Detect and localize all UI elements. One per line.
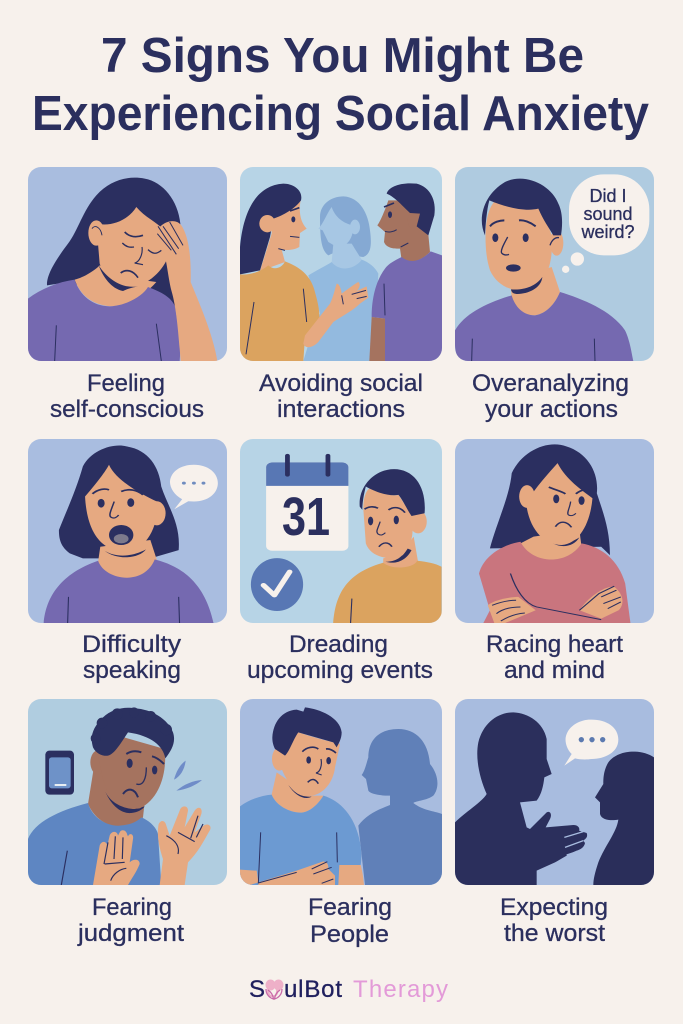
worried man (455, 179, 633, 361)
caption: overanalyzing your actions: your actions (485, 396, 618, 423)
caption: racing heart and mind: Racing heart (486, 631, 623, 658)
worried man in mustard shirt (333, 469, 442, 623)
caption: fearing judgment: judgment (77, 920, 184, 947)
thought bubble (562, 174, 649, 273)
caption: difficulty speaking: speaking (83, 657, 181, 684)
caption: dreading upcoming events: upcoming events (247, 657, 433, 684)
woman speaking (44, 446, 214, 623)
woman with hand on forehead (28, 178, 217, 361)
panel: fearing people (240, 699, 442, 885)
panel: avoiding social interactions (240, 167, 442, 361)
faded woman in background (303, 196, 378, 361)
icon: check mark (251, 558, 303, 611)
caption: feeling self-conscious (50, 370, 204, 423)
caption: avoiding social interactions: Avoiding social (259, 370, 423, 397)
bubble text: Did I (589, 186, 626, 206)
caption: avoiding social interactions: interactions (277, 396, 405, 423)
caption: fearing people: People (310, 921, 389, 948)
shadow figure (358, 729, 442, 885)
caption: dreading upcoming events (247, 631, 433, 684)
caption: racing heart and mind: and mind (504, 657, 605, 684)
icon: calendar (266, 456, 348, 551)
title: 7 Signs You Might Be (101, 29, 584, 83)
bubble text (581, 186, 635, 242)
anxious man with raised hands (28, 707, 211, 885)
caption: difficulty speaking (82, 631, 181, 684)
caption: overanalyzing your actions (472, 370, 629, 423)
caption: fearing judgment: Fearing (92, 894, 172, 921)
logo: SoulBot Therapy: Therapy (353, 976, 448, 1003)
caption: expecting the worst: Expecting (500, 894, 608, 921)
man in purple shirt (369, 183, 442, 361)
panel: expecting the worst (455, 699, 654, 885)
panel: difficulty speaking (28, 439, 227, 623)
bubble text: weird? (581, 222, 635, 242)
caption: dreading upcoming events: Dreading (289, 631, 388, 658)
panel: overanalyzing your actions (455, 167, 654, 361)
title: Experiencing Social Anxiety (32, 87, 649, 141)
caption: feeling self-conscious: self-conscious (50, 396, 204, 423)
logo: SoulBot Therapy: ulBot (284, 976, 342, 1003)
panel: racing heart and mind (455, 439, 654, 623)
worried man in blue shirt (240, 707, 364, 885)
caption: avoiding social interactions (259, 370, 423, 423)
speech bubble with dots (170, 465, 218, 509)
calendar date: 31 (282, 487, 330, 547)
caption: expecting the worst: the worst (504, 920, 605, 947)
woman with crossed arms (479, 444, 630, 623)
panel: fearing judgment (28, 699, 227, 885)
bubble text: sound (583, 204, 633, 224)
caption: difficulty speaking: Difficulty (82, 631, 181, 658)
panel: dreading upcoming events (240, 439, 442, 623)
logo: SoulBot Therapy: o (266, 976, 279, 1003)
caption: racing heart and mind (486, 631, 623, 684)
woman in mustard shirt (240, 184, 368, 361)
caption: overanalyzing your actions: Overanalyzing (472, 370, 629, 397)
title (32, 29, 649, 141)
icon: phone (45, 751, 74, 795)
caption: expecting the worst (500, 894, 608, 947)
caption: fearing people: Fearing (308, 894, 392, 921)
silhouette with open hand (455, 712, 587, 885)
icon: motion accents (174, 761, 202, 791)
speech bubble with dots (564, 720, 618, 766)
caption: feeling self-conscious: Feeling (87, 370, 165, 397)
logo: SoulBot Therapy (249, 976, 448, 1003)
caption: fearing judgment (77, 894, 184, 947)
silhouette on the right (593, 752, 654, 885)
caption: fearing people (308, 894, 392, 948)
panel: feeling self-conscious (28, 167, 227, 361)
logo: SoulBot Therapy: S (249, 976, 265, 1003)
